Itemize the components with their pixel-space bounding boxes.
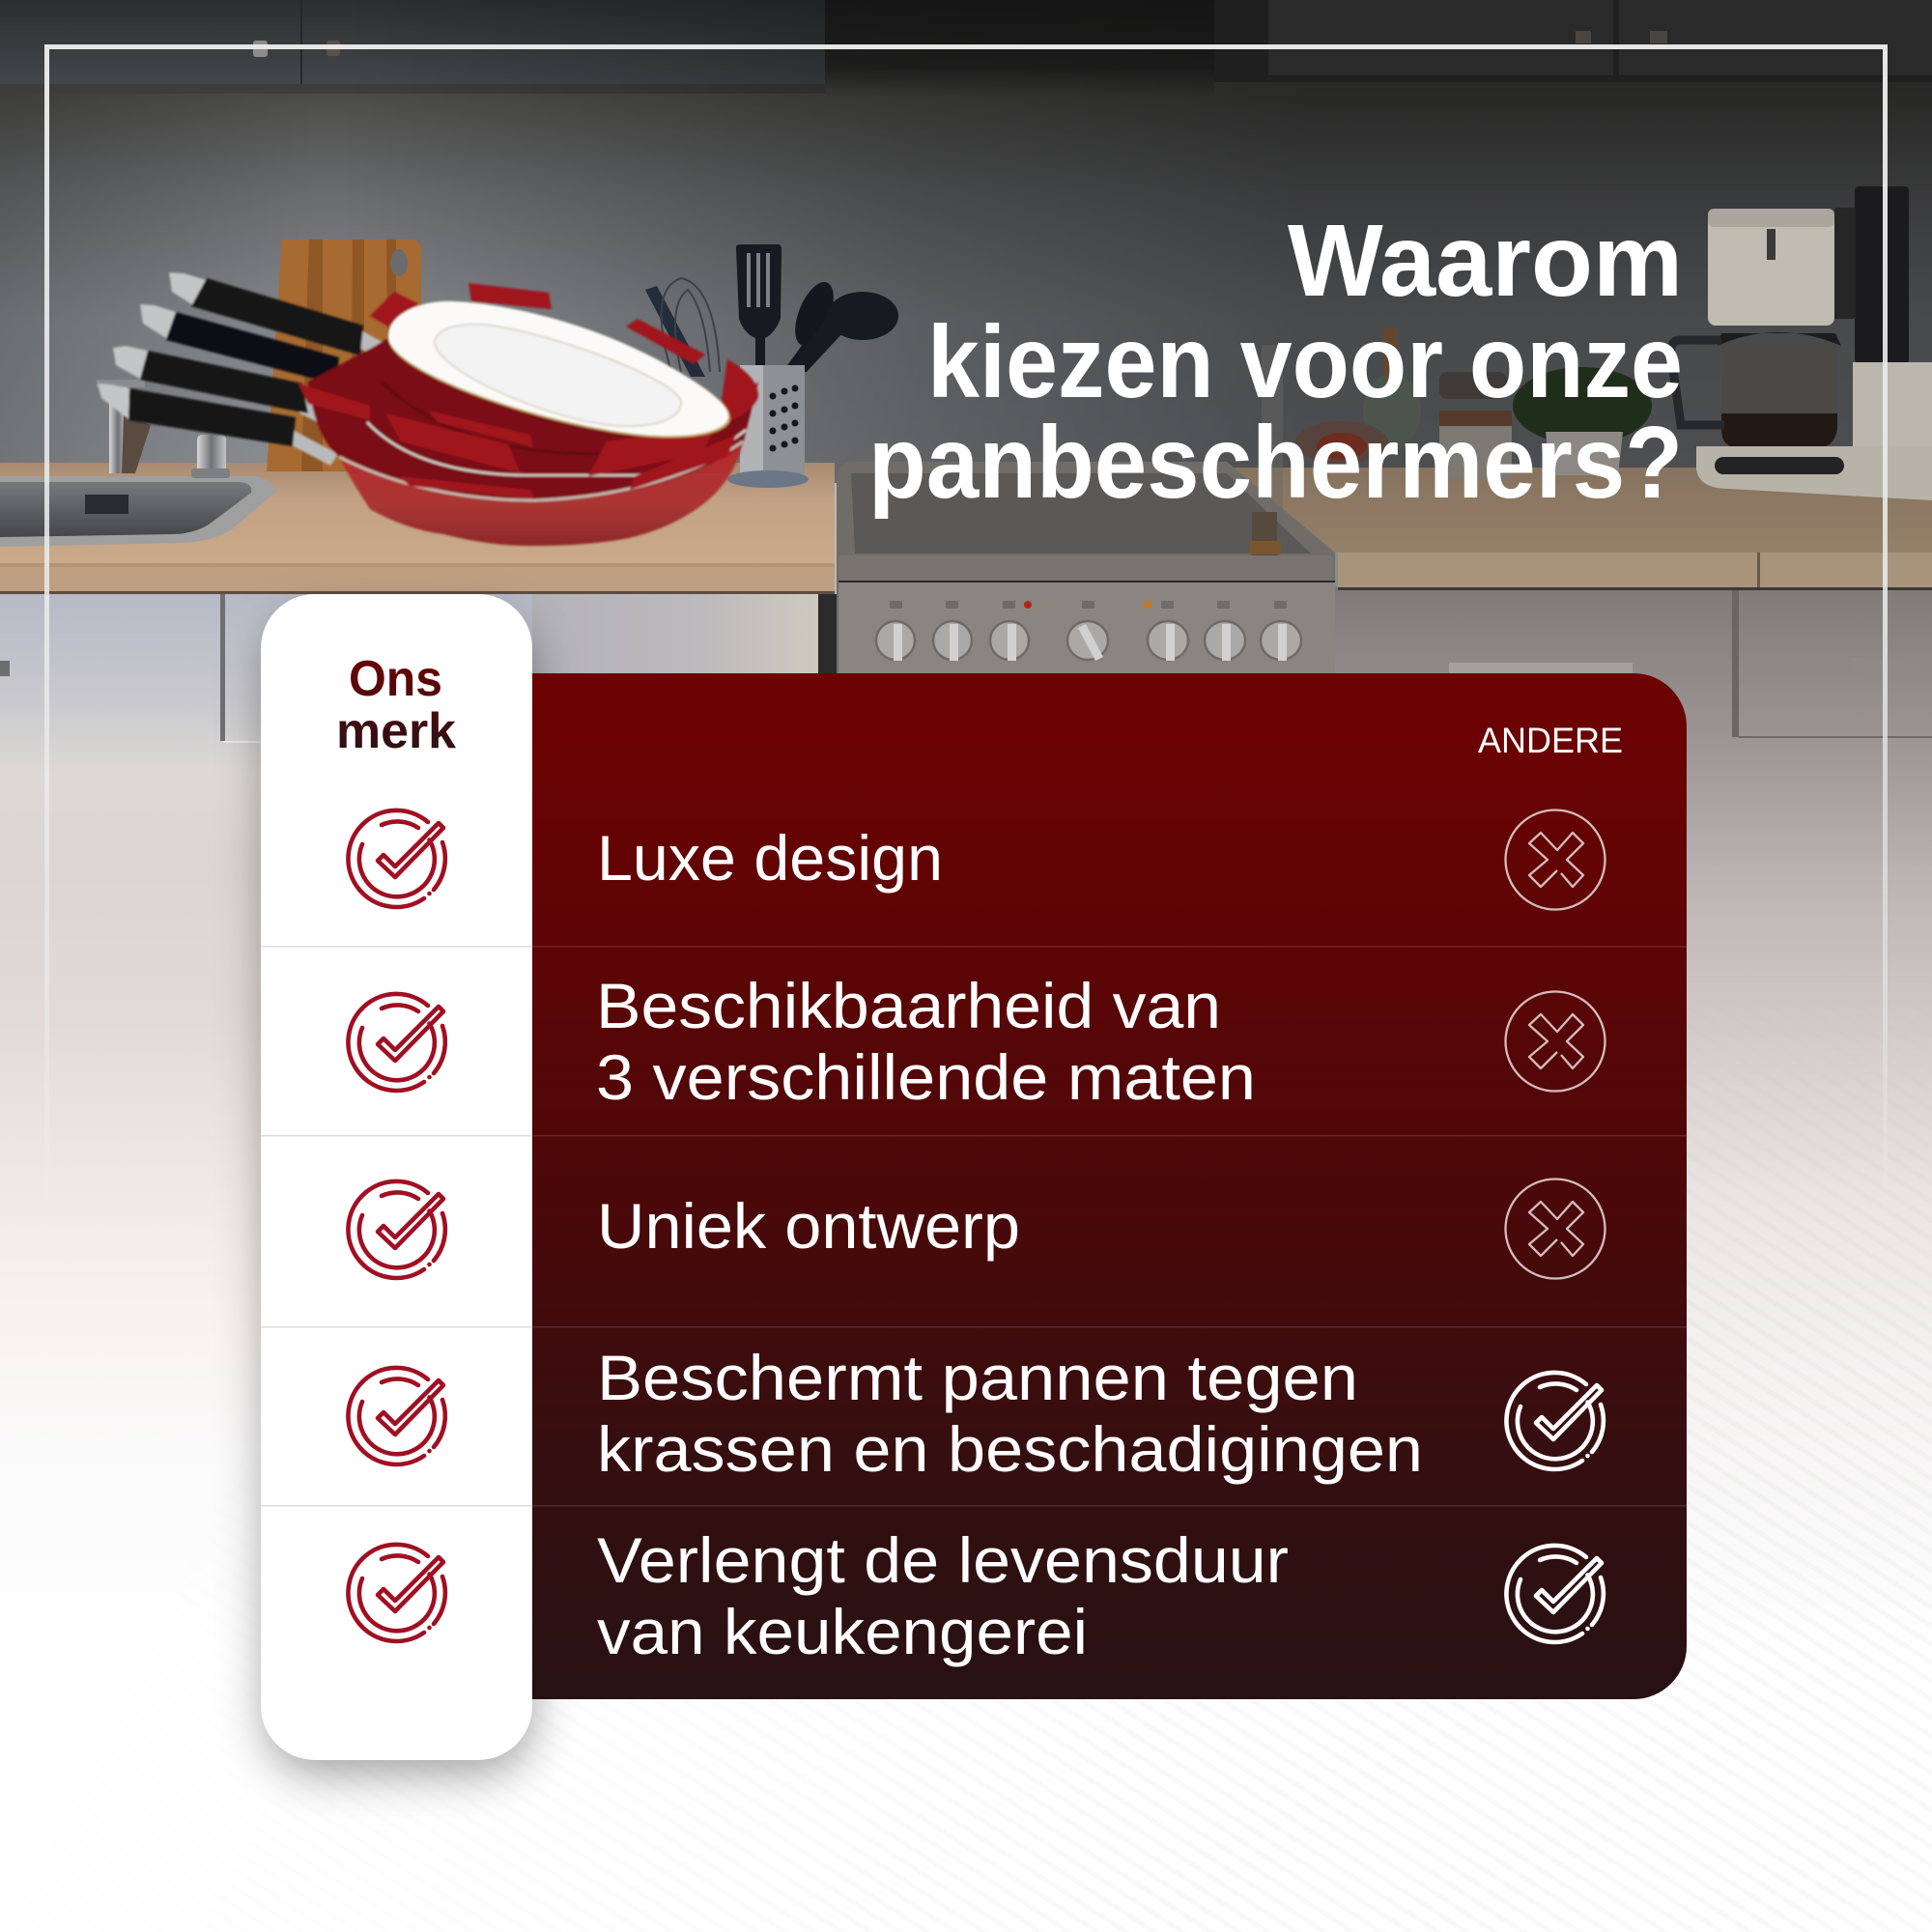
feature labels: Uniek ontwerp — [597, 1190, 1020, 1262]
feature labels: Verlengt de levensduur — [597, 1524, 1289, 1596]
counter right — [1227, 468, 1932, 590]
counter left — [0, 463, 838, 676]
lower cabinets fade — [0, 587, 1932, 1932]
our brand check icons — [348, 810, 445, 1641]
felt protector tabs — [298, 283, 758, 499]
feature labels — [596, 822, 1423, 1667]
upper left cabinets — [0, 0, 825, 94]
headline: panbeschermers? — [868, 406, 1683, 520]
panel: other brands dark red — [532, 673, 1687, 1699]
column header: andere: ANDERE — [1478, 721, 1623, 760]
pan handles — [98, 272, 396, 466]
feature labels: van keukengerei — [597, 1596, 1088, 1667]
headline: kiezen voor onze — [927, 305, 1683, 419]
feature labels: Beschermt pannen tegen — [597, 1342, 1358, 1413]
sink and faucet — [0, 380, 277, 547]
white corner frame — [46, 46, 1886, 1232]
column header: ons merk — [336, 651, 456, 759]
panel: our brand white column — [261, 594, 532, 1760]
other brand icons — [1505, 810, 1605, 1642]
column shadow — [266, 618, 531, 1774]
feature labels: Beschikbaarheid van — [596, 970, 1221, 1041]
diagonal stripe texture — [0, 966, 1932, 1932]
feature labels: 3 verschillende maten — [596, 1041, 1256, 1113]
upper right cabinets — [825, 0, 1932, 97]
bottom pan — [339, 441, 743, 546]
cooker — [837, 462, 1335, 674]
kitchen items — [1255, 186, 1932, 546]
cutting board — [267, 240, 421, 471]
feature labels: krassen en beschadigingen — [597, 1413, 1423, 1485]
feature labels: Luxe design — [597, 822, 943, 894]
column header: ons merk: merk — [336, 703, 456, 759]
white top plate — [388, 301, 730, 438]
headline — [868, 204, 1683, 520]
product image: stacked red pans with protectors — [98, 272, 758, 546]
stacked pan bodies — [308, 333, 758, 502]
utensil holder — [645, 244, 898, 488]
coffee maker — [1671, 186, 1932, 500]
headline: Waarom — [1288, 204, 1683, 318]
column header: ons merk: Ons — [349, 651, 442, 707]
